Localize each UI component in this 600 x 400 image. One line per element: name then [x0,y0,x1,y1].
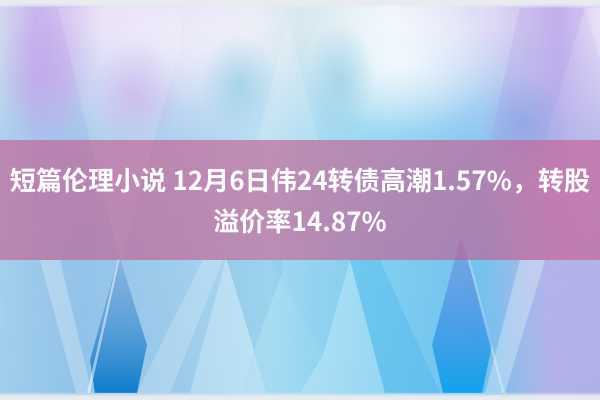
title text: 溢价率14.87% [213,202,387,239]
pink title banner [0,140,600,260]
title text: 短篇伦理小说 12月6日伟24转债高潮1.57%，转股 [10,161,590,198]
facets: left group [40,8,318,393]
title text [10,161,590,239]
facets: right group [270,8,600,393]
